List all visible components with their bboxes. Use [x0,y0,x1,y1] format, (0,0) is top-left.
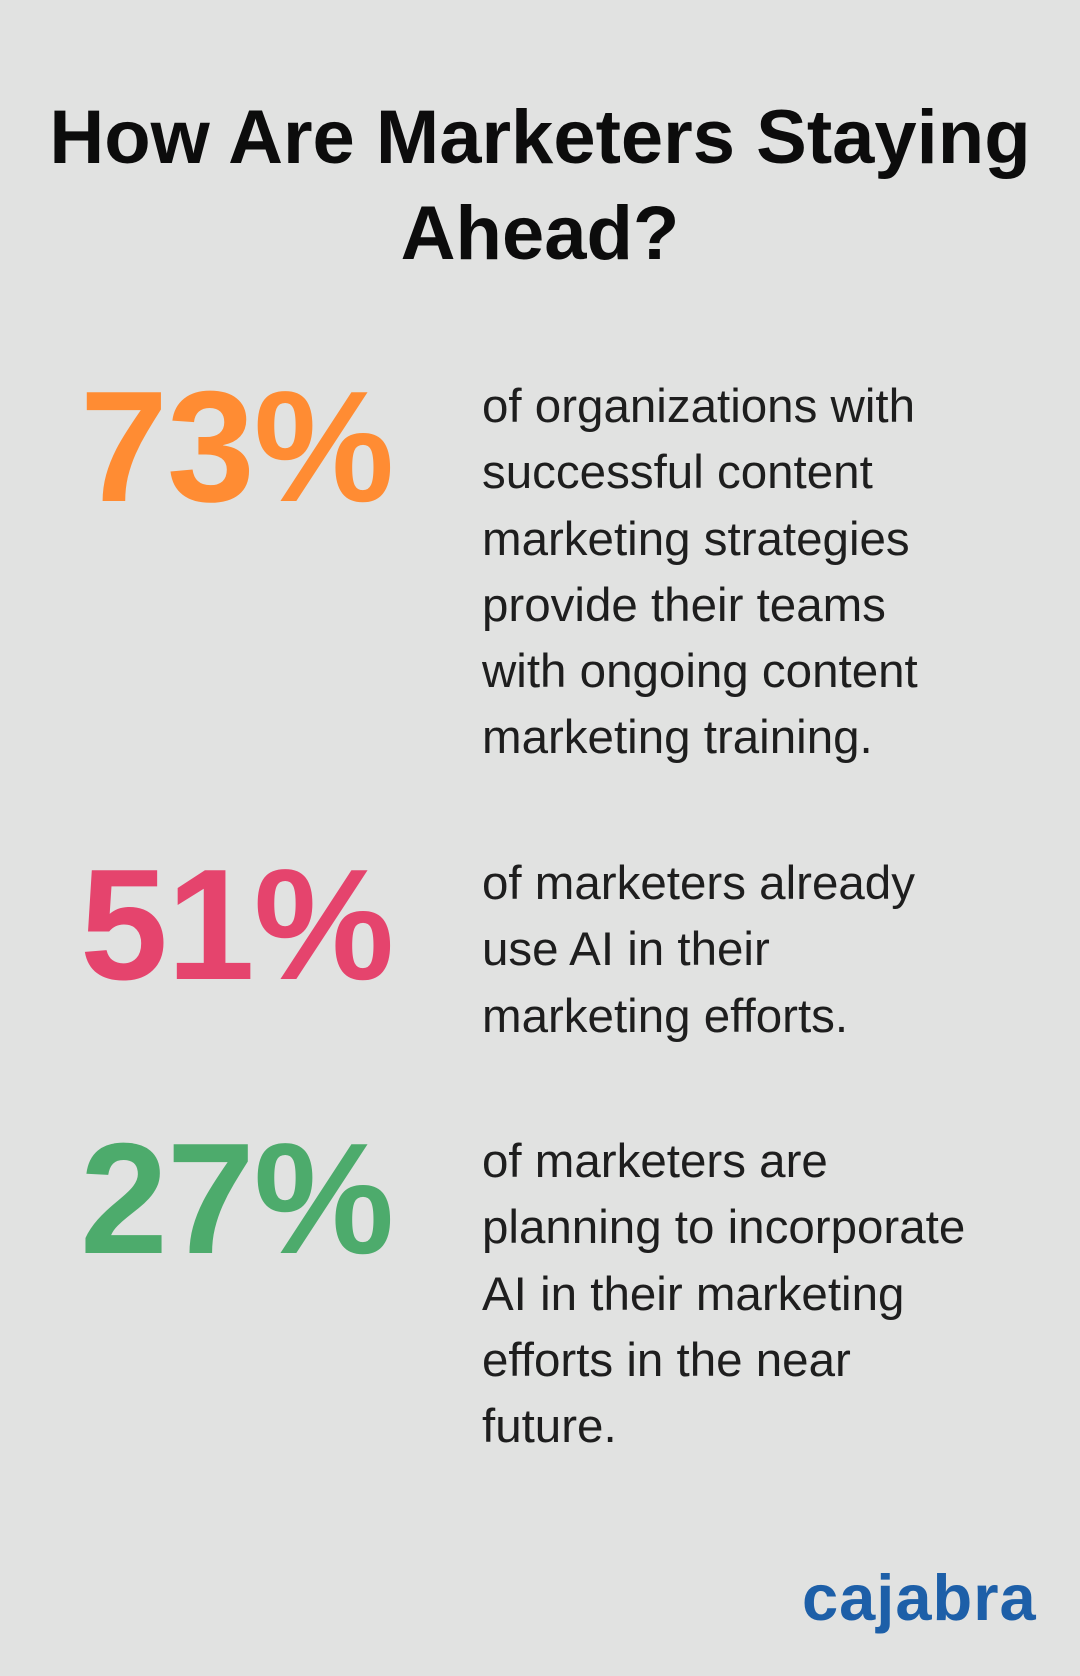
text: 51% description: use AI in their [482,923,770,976]
text: 73% description: of organizations with [482,380,915,433]
text: 27% description [482,1135,965,1453]
text: 73% description: marketing strategies [482,513,910,566]
logo: cajabra [802,1561,1037,1634]
text: 27% description: AI in their marketing [482,1268,904,1321]
text: 27% description: future. [482,1400,617,1453]
title: Ahead? [401,191,679,276]
text: 51% description: of marketers already [482,857,915,910]
text: 73% description: successful content [482,446,873,499]
title [49,95,1031,276]
text: 51% description: marketing efforts. [482,990,848,1043]
stat: 27%: 27% [80,1111,393,1287]
text: 73% description: marketing training. [482,711,873,764]
text: 51% description [482,857,915,1043]
stat: 51%: 51% [80,837,393,1013]
text: 73% description: provide their teams [482,579,886,632]
text: 27% description: efforts in the near [482,1334,851,1387]
text: 73% description [482,380,918,764]
stat: 73%: 73% [80,359,393,535]
text: 73% description: with ongoing content [482,645,918,698]
text: 27% description: planning to incorporate [482,1201,965,1254]
text: 27% description: of marketers are [482,1135,828,1188]
title: How Are Marketers Staying [49,95,1031,180]
